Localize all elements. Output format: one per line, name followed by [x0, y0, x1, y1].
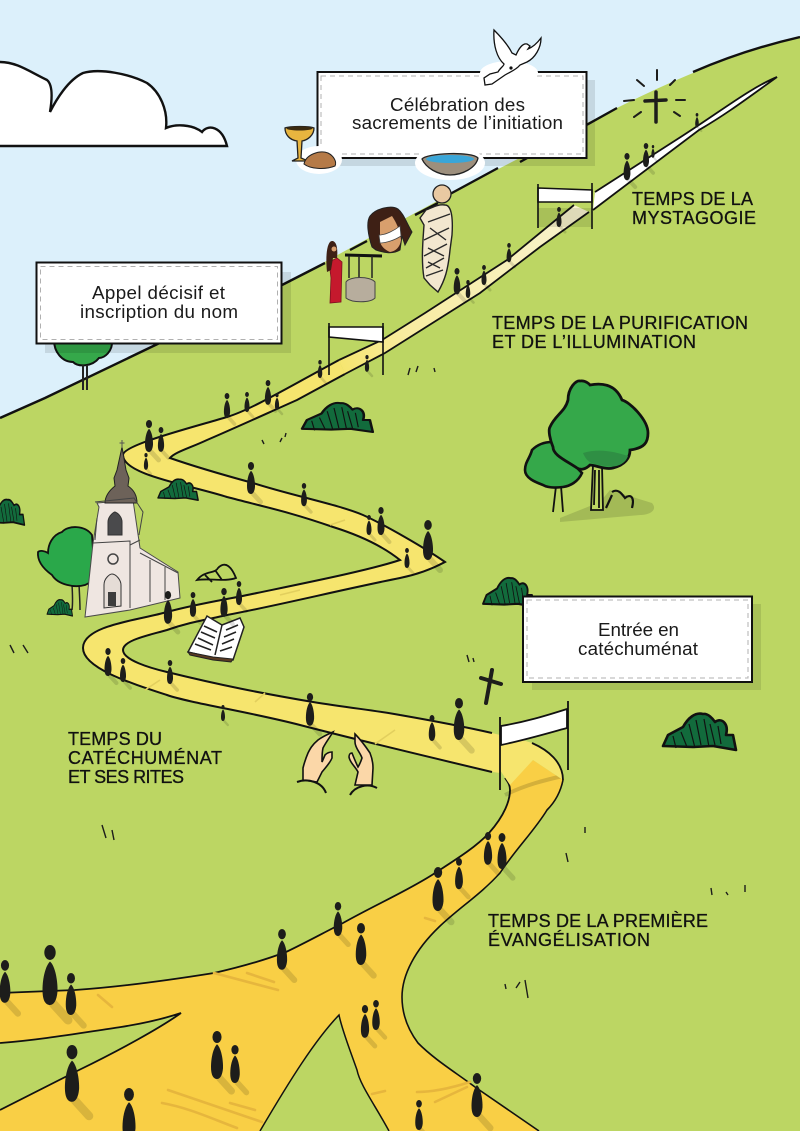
road: lower first evangelisation	[0, 760, 563, 1131]
grass tufts	[10, 366, 745, 998]
box: Celebration: Célébration des	[390, 94, 525, 115]
icon: cross on the grass	[481, 670, 501, 703]
church	[85, 440, 180, 617]
tree beside church	[38, 527, 95, 610]
box: Appel decisif: Appel décisif et	[92, 282, 226, 303]
tree group: right	[525, 381, 654, 522]
box: Entree en catechumenat	[523, 596, 761, 690]
heading: purification: ET DE L’ILLUMINATION	[492, 332, 696, 352]
woman at the well	[326, 241, 342, 303]
box: Entree en catechumenat: Entrée en	[598, 619, 679, 640]
gate: sacraments	[538, 183, 592, 229]
open book	[188, 616, 244, 662]
heading: premiere evangelisation: TEMPS DE LA PREMIÈRE	[488, 911, 708, 931]
well	[345, 255, 382, 302]
baptised person wrapped in bandages	[420, 185, 452, 292]
cloud	[0, 62, 227, 146]
box: Celebration	[318, 72, 595, 166]
heading: mystagogie: TEMPS DE LA	[632, 189, 753, 209]
road: purification ribbon	[339, 205, 589, 374]
heading: purification: TEMPS DE LA PURIFICATION	[492, 313, 748, 333]
tree: behind the Appel box	[54, 340, 112, 390]
bushes	[0, 403, 736, 750]
box: Celebration: sacrements de l’initiation	[352, 112, 563, 133]
icon: dove	[480, 30, 541, 85]
heading: mystagogie: MYSTAGOGIE	[632, 208, 756, 228]
heading: catechumenat: ET SES RITES	[68, 767, 184, 787]
icon: bowl of water	[415, 146, 485, 180]
icon: hands	[297, 732, 377, 795]
gate: entering catechumenate	[500, 701, 568, 790]
head with blindfold	[368, 207, 412, 253]
people on the road	[0, 113, 701, 1131]
box: Appel decisif	[36, 262, 291, 353]
box: Entree en catechumenat: catéchuménat	[578, 638, 699, 659]
road: mystagogy white ribbon	[593, 77, 777, 210]
hill outline	[0, 37, 800, 418]
box: Appel decisif: inscription du nom	[80, 301, 238, 322]
road: catechumenate ribbon	[83, 360, 563, 785]
icon: radiant cross	[624, 70, 685, 122]
heading: catechumenat: TEMPS DU	[68, 729, 162, 749]
heading: premiere evangelisation: ÉVANGÉLISATION	[488, 930, 650, 950]
chalice and bread	[285, 126, 342, 174]
gate: decisive call	[329, 323, 383, 375]
road: purification ribbon edges	[339, 205, 589, 374]
heading: catechumenat: CATÉCHUMÉNAT	[68, 748, 222, 768]
